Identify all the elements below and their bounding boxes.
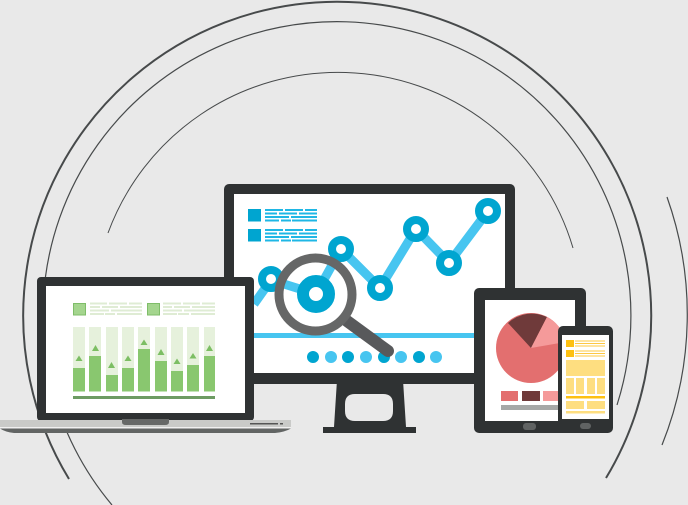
laptop screen xyxy=(46,286,245,413)
phone screen xyxy=(562,335,609,419)
tablet xyxy=(474,288,586,433)
pie chart xyxy=(496,313,566,383)
icon: magnifying glass xyxy=(279,258,388,351)
laptop xyxy=(0,277,291,433)
legend: monitor xyxy=(248,209,317,242)
phone layout blocks xyxy=(566,340,605,414)
tablet body xyxy=(474,288,586,433)
monitor xyxy=(224,184,515,433)
tablet legend xyxy=(501,391,561,410)
bar chart xyxy=(73,327,215,399)
phone xyxy=(558,326,613,433)
monitor screen xyxy=(234,194,505,373)
phone button xyxy=(580,423,591,429)
legend: laptop xyxy=(74,304,215,315)
pagination dots xyxy=(307,351,442,363)
laptop base xyxy=(0,419,291,433)
phone body xyxy=(558,326,613,433)
line chart xyxy=(254,202,497,307)
tablet button xyxy=(523,423,536,430)
axis line xyxy=(254,333,474,338)
monitor stand xyxy=(323,380,416,433)
monitor body xyxy=(224,184,515,384)
laptop body xyxy=(37,277,254,421)
tablet screen xyxy=(485,300,575,421)
